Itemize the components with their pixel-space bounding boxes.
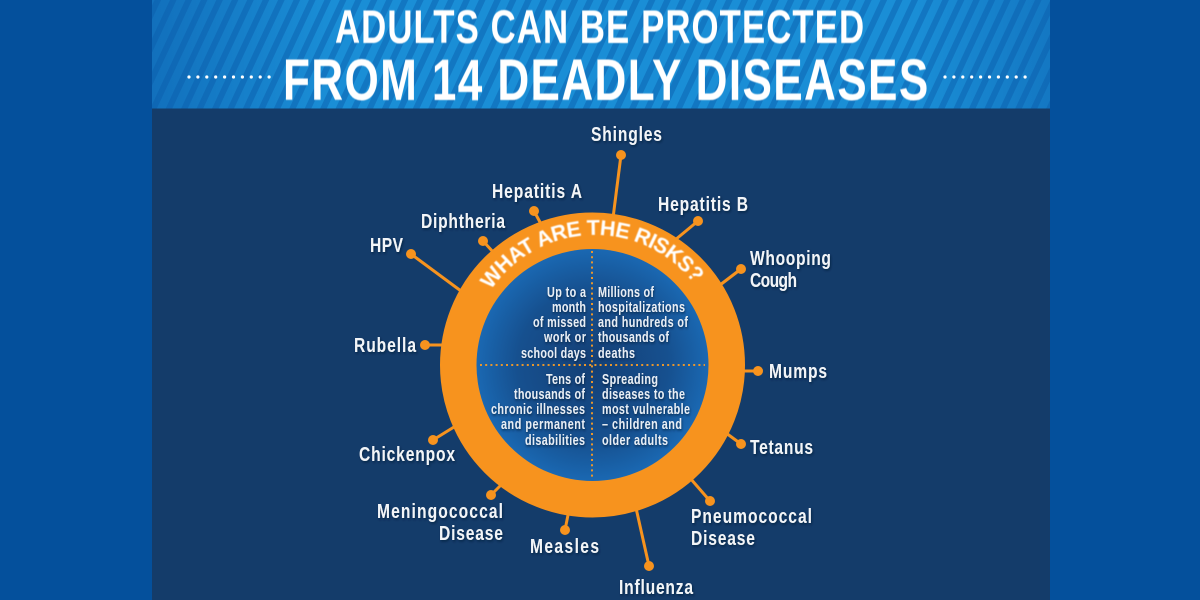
orange ring bbox=[458, 231, 726, 499]
connector: Mumps bbox=[742, 366, 763, 376]
label: Mumps: Mumps bbox=[769, 360, 827, 382]
label: Whooping Cough bbox=[750, 247, 831, 291]
risk text: bottom right bbox=[602, 370, 690, 448]
dotted cross dividers bbox=[480, 251, 705, 479]
label: Rubella: Rubella bbox=[354, 334, 417, 356]
risk text: top left: Up to a bbox=[547, 283, 587, 300]
risk text: top left: month bbox=[552, 298, 586, 315]
label: Meningococcal Disease: Meningococcal bbox=[377, 500, 503, 522]
risk text: bottom left: and permanent bbox=[501, 415, 586, 432]
label: Hepatitis A: Hepatitis A bbox=[492, 180, 582, 202]
label: Whooping Cough: Whooping bbox=[750, 247, 831, 269]
risk text: top right: hospitalizations bbox=[598, 298, 685, 315]
label: Pneumococcal Disease bbox=[691, 505, 812, 549]
header banner bbox=[152, 0, 1050, 112]
risk text: bottom left: chronic illnesses bbox=[491, 400, 585, 417]
connector: Pneumococcal Disease bbox=[690, 478, 715, 506]
label: Measles: Measles bbox=[530, 535, 599, 557]
risk text: bottom left: thousands of bbox=[514, 385, 586, 402]
label: Meningococcal Disease: Disease bbox=[439, 522, 503, 544]
connector: Hepatitis B bbox=[675, 216, 703, 240]
risk text: top left: work or bbox=[543, 328, 586, 345]
risk text: bottom right: – children and bbox=[602, 415, 682, 432]
connector: Shingles bbox=[613, 150, 626, 218]
connector: Chickenpox bbox=[428, 427, 454, 445]
label: Influenza: Influenza bbox=[619, 576, 694, 598]
risk text: top left: of missed bbox=[533, 313, 586, 330]
risk text: top left bbox=[521, 283, 587, 361]
connector: Rubella bbox=[420, 340, 444, 350]
connector: HPV bbox=[406, 249, 461, 291]
risk text: bottom right: older adults bbox=[602, 431, 668, 448]
connector lines and dots bbox=[406, 150, 763, 571]
connector: Whooping Cough bbox=[720, 264, 746, 285]
main dark panel bbox=[152, 108, 1050, 600]
dotted rule right bbox=[945, 75, 1028, 79]
risk text: bottom right: most vulnerable bbox=[602, 400, 690, 417]
connector: Hepatitis A bbox=[529, 206, 541, 224]
dotted rule left bbox=[189, 75, 272, 79]
ring heading: What are the risks?: WHAT ARE THE RISKS? bbox=[478, 219, 704, 288]
label: Whooping Cough: Cough bbox=[750, 269, 797, 291]
connector: Tetanus bbox=[726, 433, 746, 449]
label: Pneumococcal Disease: Disease bbox=[691, 527, 755, 549]
connector: Influenza bbox=[636, 508, 654, 571]
label: Chickenpox: Chickenpox bbox=[359, 443, 455, 465]
label: Hepatitis B: Hepatitis B bbox=[658, 193, 748, 215]
label: HPV: HPV bbox=[370, 234, 403, 256]
risk text: top right: thousands of bbox=[598, 328, 670, 345]
risk text: bottom left bbox=[491, 370, 586, 448]
title line 2: FROM 14 DEADLY DISEASES bbox=[283, 47, 928, 112]
label: Tetanus: Tetanus bbox=[750, 436, 813, 458]
title line 1: ADULTS CAN BE PROTECTED bbox=[335, 1, 864, 53]
risk text: top right: and hundreds of bbox=[598, 313, 689, 330]
connector: Meningococcal Disease bbox=[486, 484, 502, 500]
label: Meningococcal Disease bbox=[377, 500, 503, 544]
label: Pneumococcal Disease: Pneumococcal bbox=[691, 505, 812, 527]
risk text: bottom left: disabilities bbox=[525, 431, 585, 448]
risk text: top left: school days bbox=[521, 344, 586, 361]
label: Diphtheria: Diphtheria bbox=[421, 210, 506, 232]
connector: Diphtheria bbox=[478, 236, 494, 253]
risk text: top right bbox=[598, 283, 689, 361]
disease labels bbox=[354, 123, 831, 598]
risk text: bottom right: Spreading bbox=[602, 370, 658, 387]
label: Shingles: Shingles bbox=[591, 123, 662, 145]
inner blue disc bbox=[476, 249, 708, 481]
risk text: top right: Millions of bbox=[598, 283, 655, 300]
risk text: top right: deaths bbox=[598, 344, 635, 361]
connector: Measles bbox=[560, 515, 570, 535]
risk text: bottom right: diseases to the bbox=[602, 385, 685, 402]
risk text: bottom left: Tens of bbox=[546, 370, 586, 387]
